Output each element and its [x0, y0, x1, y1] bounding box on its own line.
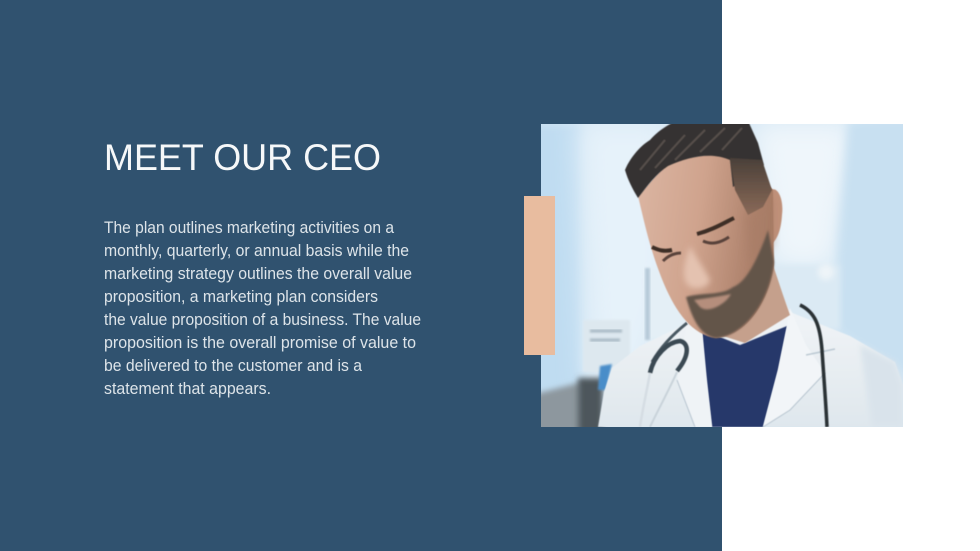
- mouth: [694, 294, 731, 309]
- body text block: proposition, a marketing plan considers: [104, 288, 378, 306]
- beard: [686, 230, 774, 338]
- hair fade at temple: [730, 158, 772, 215]
- body text block: The plan outlines marketing activities on a: [104, 219, 394, 237]
- ear: [772, 188, 783, 242]
- background panel: [0, 0, 722, 551]
- body text block: proposition is the overall promise of value to: [104, 334, 416, 352]
- body text block: statement that appears.: [104, 380, 271, 398]
- body text block: monthly, quarterly, or annual basis while the: [104, 242, 409, 260]
- body text block: the value proposition of a business. The value: [104, 311, 421, 329]
- neck: [720, 262, 790, 343]
- body text block: [104, 219, 421, 398]
- photo background: blurred hospital corridor: [530, 120, 915, 435]
- navy scrubs: [702, 326, 787, 427]
- peach accent bar: [524, 196, 555, 355]
- body text block: marketing strategy outlines the overall value: [104, 265, 412, 283]
- eyes and brows: [652, 218, 734, 261]
- cheek shadow: [774, 236, 779, 250]
- hair: [625, 123, 772, 215]
- title: MEET OUR CEO: [104, 137, 381, 178]
- nose highlight: [684, 246, 710, 288]
- stethoscope: [640, 305, 827, 427]
- coat lapels: [677, 308, 835, 427]
- white lab coat: [598, 308, 903, 427]
- body text block: be delivered to the customer and is a: [104, 357, 362, 375]
- photo: doctor portrait: [530, 120, 915, 435]
- face: [638, 150, 774, 338]
